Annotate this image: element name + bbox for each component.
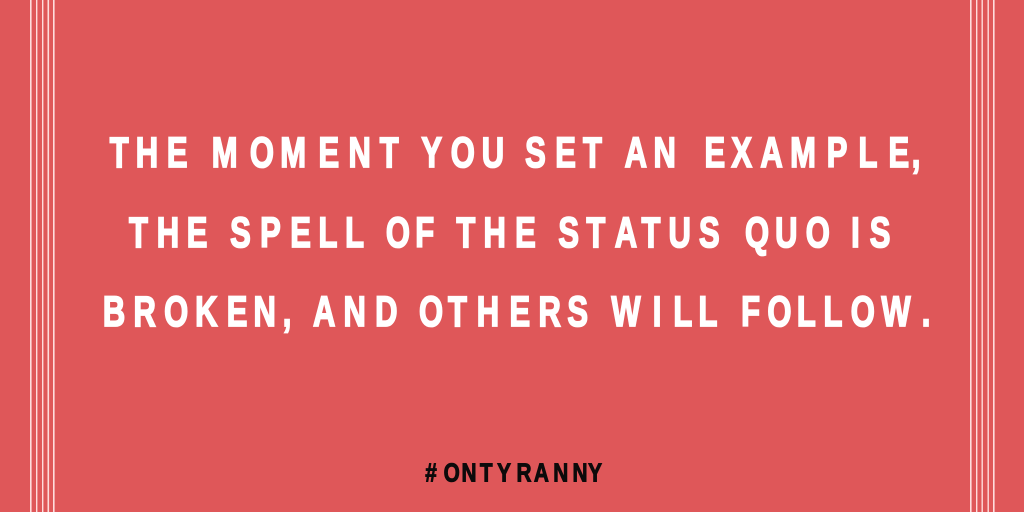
quote line 3: BROKEN, AND OTHERS WILL FOLLOW. <box>103 287 930 335</box>
quote line 2: THE SPELL OF THE STATUS QUO IS <box>129 208 890 256</box>
hashtag: #ONTYRANNY <box>425 458 602 487</box>
quote line 1: THE MOMENT YOU SET AN EXAMPLE, <box>110 128 920 176</box>
quote text <box>103 128 930 335</box>
